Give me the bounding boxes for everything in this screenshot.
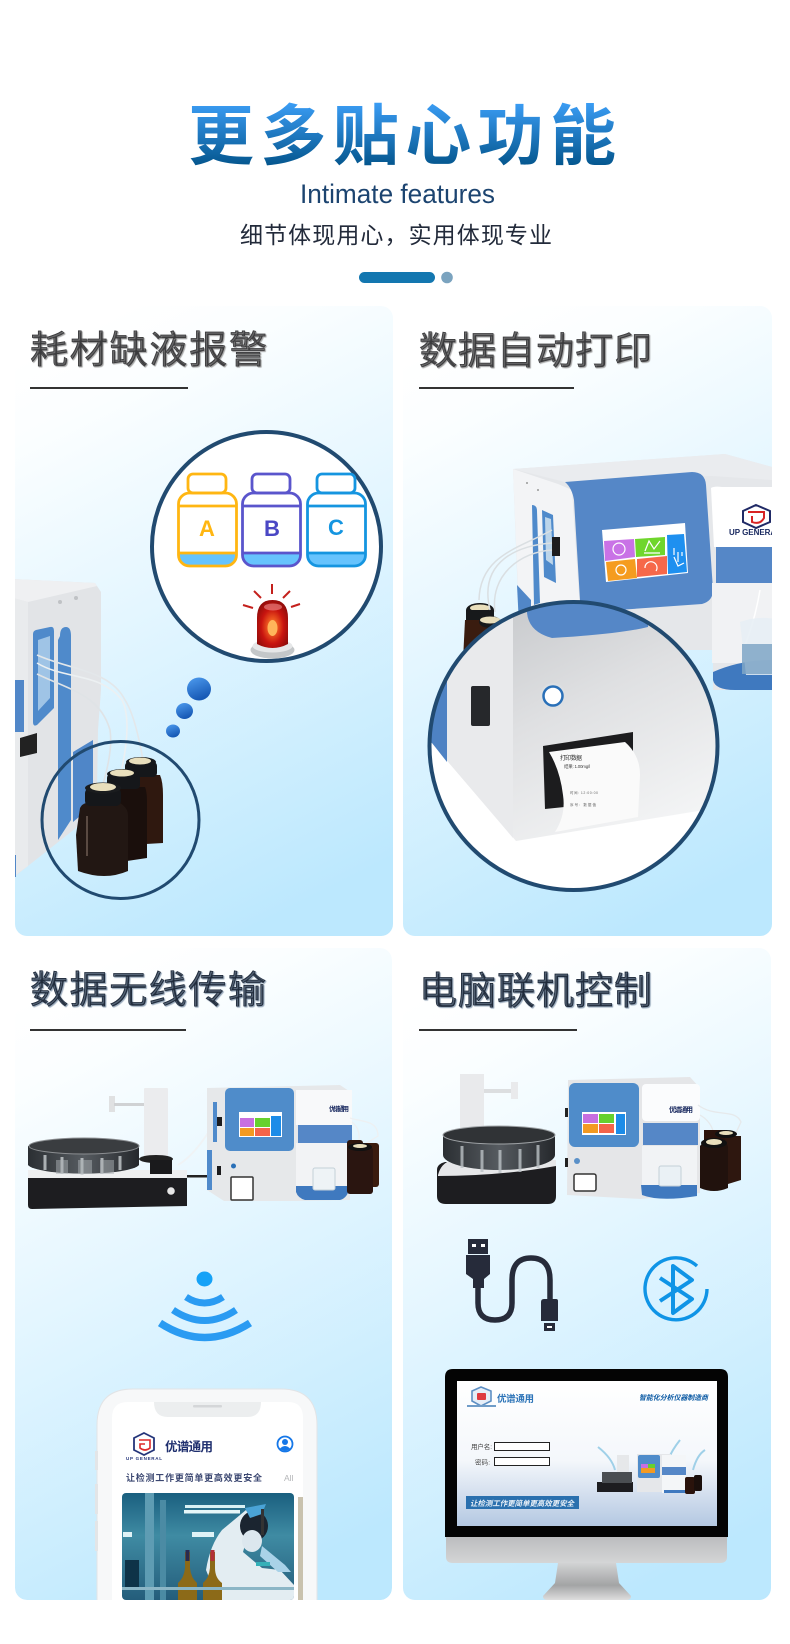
printer slot and receipt: 序号: 数据值: [570, 802, 596, 807]
monitor stand: [543, 1563, 631, 1600]
screen banner: 让检测工作更简单更高效更安全: [470, 1499, 576, 1508]
password field: [475, 1458, 550, 1466]
screen brand: 优谱通用: [497, 1393, 534, 1405]
reagent bottles: [76, 757, 163, 876]
printer slot and receipt: 时间: 12:00:00: [570, 790, 598, 795]
icon: user avatar: [278, 1436, 292, 1452]
print head connector: [471, 686, 490, 726]
analyzer: 优谱通用: [669, 1105, 693, 1114]
panel: PC-linked control: [403, 948, 771, 1600]
panel: automatic data printing: [403, 306, 781, 936]
bottle B icon: B: [264, 516, 280, 541]
screen slogan: 智能化分析仪器制造商: [639, 1394, 709, 1402]
product image: [597, 1440, 705, 1494]
bottle C icon: C: [328, 515, 344, 540]
panel: consumable low-liquid alarm: [13, 306, 393, 936]
thought bubbles: [166, 678, 211, 738]
heading underline: [30, 387, 188, 389]
logo: UP General: [730, 504, 772, 535]
icon: wifi signal: [160, 1272, 250, 1338]
heading underline: [419, 387, 574, 389]
app logo: [126, 1433, 162, 1461]
mobile phone mockup: [95, 1388, 318, 1600]
all link: All: [284, 1473, 294, 1483]
title: 更多贴心功能: [188, 99, 616, 173]
icon: usb cable: [466, 1239, 558, 1331]
screen banner: [466, 1496, 579, 1509]
username field: 用户名:: [471, 1442, 492, 1451]
autosampler: [437, 1074, 556, 1204]
heading underline: [30, 1029, 186, 1031]
monitor bezel: [445, 1369, 728, 1537]
zoom circle outline: [430, 602, 718, 890]
analyzer side view: [13, 579, 143, 877]
slogan: 让检测工作更简单更高效更安全: [126, 1472, 262, 1483]
bottle B icon: [242, 474, 300, 566]
heading underline: [419, 1029, 577, 1031]
small highlight circle: [42, 742, 199, 898]
autosampler: [28, 1088, 213, 1209]
bottle C icon: [308, 474, 366, 566]
phone notch: [154, 1402, 261, 1417]
panel heading: 数据无线传输: [30, 970, 266, 1012]
analyzer: [565, 1077, 741, 1199]
password field: 密码:: [475, 1458, 490, 1466]
panel heading: 耗材缺液报警: [30, 330, 267, 372]
printer detail circle: [425, 595, 725, 890]
power button: [542, 685, 564, 707]
panel heading: 数据自动打印: [419, 331, 652, 373]
english subtitle: Intimate features: [300, 179, 495, 209]
login screen: [457, 1381, 717, 1526]
screen logo: [467, 1387, 496, 1407]
printer slot and receipt: 打印 数据: [560, 754, 582, 762]
app logo: UP GENERAL: [126, 1456, 162, 1461]
large callout circle: [152, 432, 381, 661]
bottle A icon: A: [199, 516, 215, 541]
title decoration: [359, 272, 453, 283]
panel heading: 电脑联机控制: [419, 971, 652, 1013]
username field: [471, 1442, 550, 1451]
icon: bluetooth: [645, 1258, 707, 1320]
analyzer with touch screen: [463, 454, 781, 690]
icon: red alarm beacon: [243, 584, 300, 658]
next card sliver: [298, 1497, 303, 1600]
bottle A icon: [178, 474, 236, 566]
printer slot and receipt: 结果: 1.00mg/l: [564, 763, 590, 770]
panel: wireless data transmission: [15, 948, 392, 1644]
printer slot and receipt: [543, 732, 640, 832]
desktop monitor: [445, 1369, 728, 1600]
small logo: 优谱通用: [329, 1104, 349, 1113]
logo: UP General: UP GENERAL: [729, 528, 781, 537]
laboratory photo: [122, 1493, 294, 1600]
app brand name: 优谱通用: [165, 1439, 213, 1454]
tagline: 细节体现用心，实用体现专业: [240, 222, 552, 248]
monitor chin: [446, 1537, 727, 1563]
analyzer: [207, 1085, 379, 1201]
